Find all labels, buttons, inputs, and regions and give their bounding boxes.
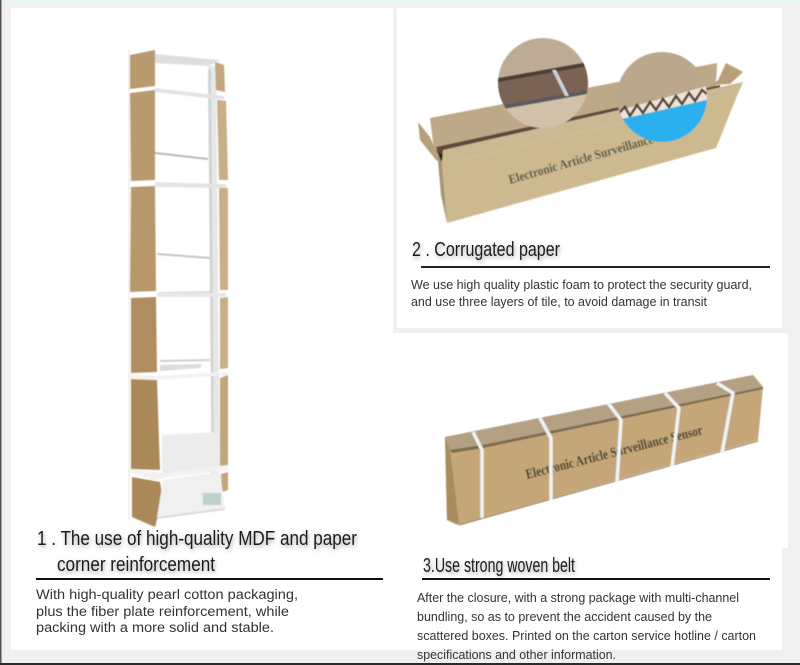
heading: step 1: 1 . The use of high-quality MDF and paper [37,527,357,550]
rule: step 3 [422,578,770,580]
panel: strong woven belt [393,333,788,650]
heading: step 3: 3.Use strong woven belt [423,554,575,577]
heading: step 1 [37,527,357,576]
panel: MDF and paper corner reinforcement [11,8,393,650]
icon: open carton with magnified circles [418,38,743,223]
text block: step 3 description: After the closure, with a strong package with multi-channel [417,590,739,605]
text block: step 1 description: plus the fiber plate reinforcement, while [36,604,289,619]
panel: corrugated paper [397,8,782,328]
heading: step 2: 2 . Corrugated paper [412,238,560,261]
text block: step 3 description: scattered boxes. Printed on the carton service hotline / carton [417,628,756,643]
rule: step 1 [36,578,383,580]
text block: step 2 description: We use high quality plastic foam to protect the security guard, [411,277,752,292]
icon: strapped carton: Electronic Article Surveillance Sensor [524,423,704,483]
rule: step 2 [421,266,770,268]
text block: step 3 description: bundling, so as to prevent the accident caused by the [417,609,712,624]
text block: step 3 description: specifications and other information. [417,647,616,662]
icon: strapped carton [445,375,763,525]
icon: wrapped security gate [128,50,228,527]
text block: step 3 description [417,590,756,662]
heading: step 1: corner reinforcement [57,553,215,576]
text block: step 1 description [36,587,298,635]
text block: step 1 description: With high-quality pearl cotton packaging, [36,587,298,602]
text block: step 1 description: packing with a more solid and stable. [36,620,274,635]
text block: step 2 description: and use three layers of tile, to avoid damage in transit [411,294,707,309]
icon: open carton with magnified circles: Electronic Article Surveillance [507,131,655,187]
text block: step 2 description [411,277,752,309]
